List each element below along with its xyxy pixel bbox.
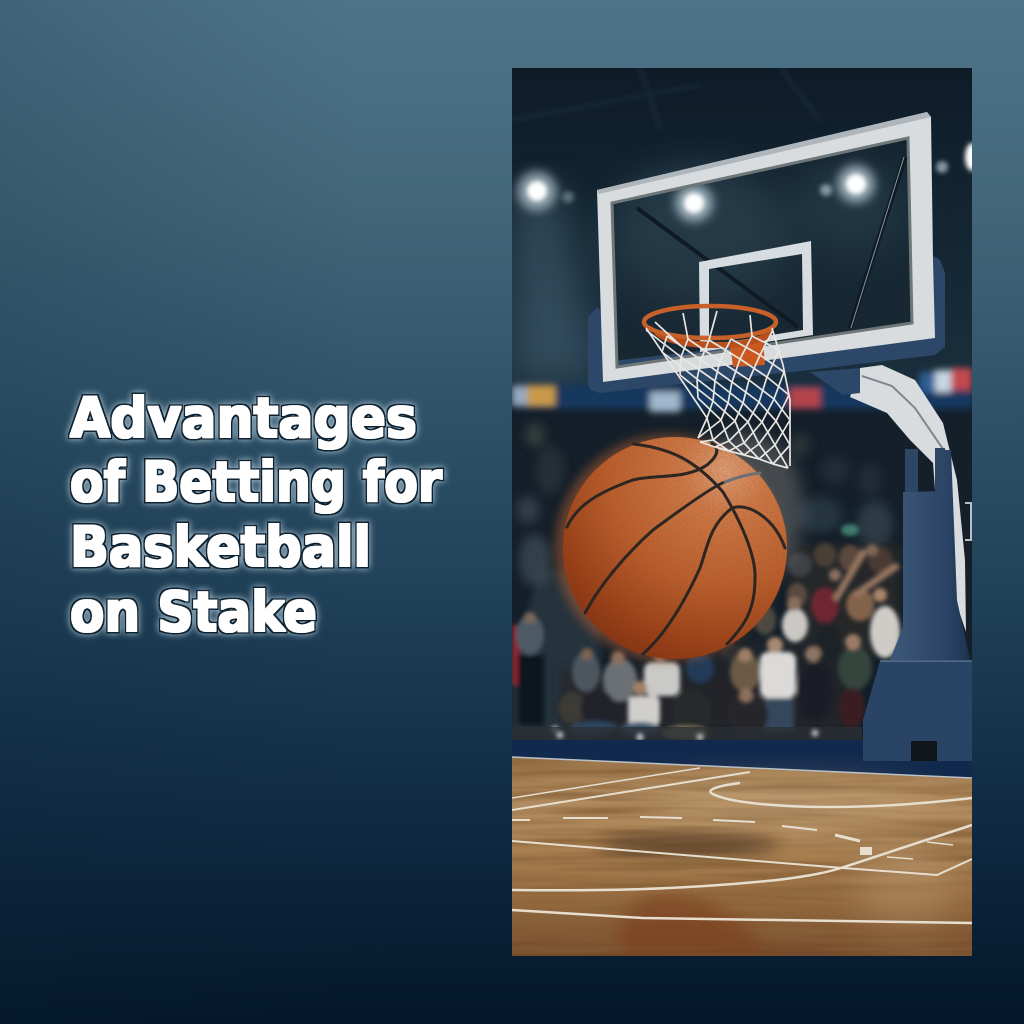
stand base xyxy=(863,661,972,761)
shooter square xyxy=(699,241,813,352)
scoreboard banner xyxy=(512,368,972,412)
stand handle xyxy=(965,503,971,540)
ball reflection on floor xyxy=(620,895,765,956)
navy pads xyxy=(588,251,945,393)
court lines xyxy=(512,757,972,923)
panel: basketball photo xyxy=(512,68,979,956)
ball shadow on floor xyxy=(600,835,780,855)
title: of Betting for xyxy=(70,450,442,514)
rim and bracket xyxy=(644,306,776,367)
ball halo xyxy=(555,432,803,662)
court apron xyxy=(512,740,972,768)
arena upper background xyxy=(512,68,972,405)
wooden floor xyxy=(512,757,972,956)
frame xyxy=(597,112,935,382)
hoop stand xyxy=(850,365,972,761)
stand column xyxy=(890,450,970,660)
title: Advantages xyxy=(70,386,417,450)
backboard xyxy=(588,112,945,395)
inner rim xyxy=(612,138,912,367)
title xyxy=(70,386,442,644)
glass reflections xyxy=(637,208,798,327)
title: on Stake xyxy=(70,580,317,644)
net xyxy=(646,311,790,468)
basketball xyxy=(563,437,787,659)
ball seams xyxy=(567,444,785,654)
crowd xyxy=(512,405,972,745)
stadium lights xyxy=(517,143,979,222)
title: Basketball xyxy=(70,515,371,579)
support arm xyxy=(850,365,966,632)
